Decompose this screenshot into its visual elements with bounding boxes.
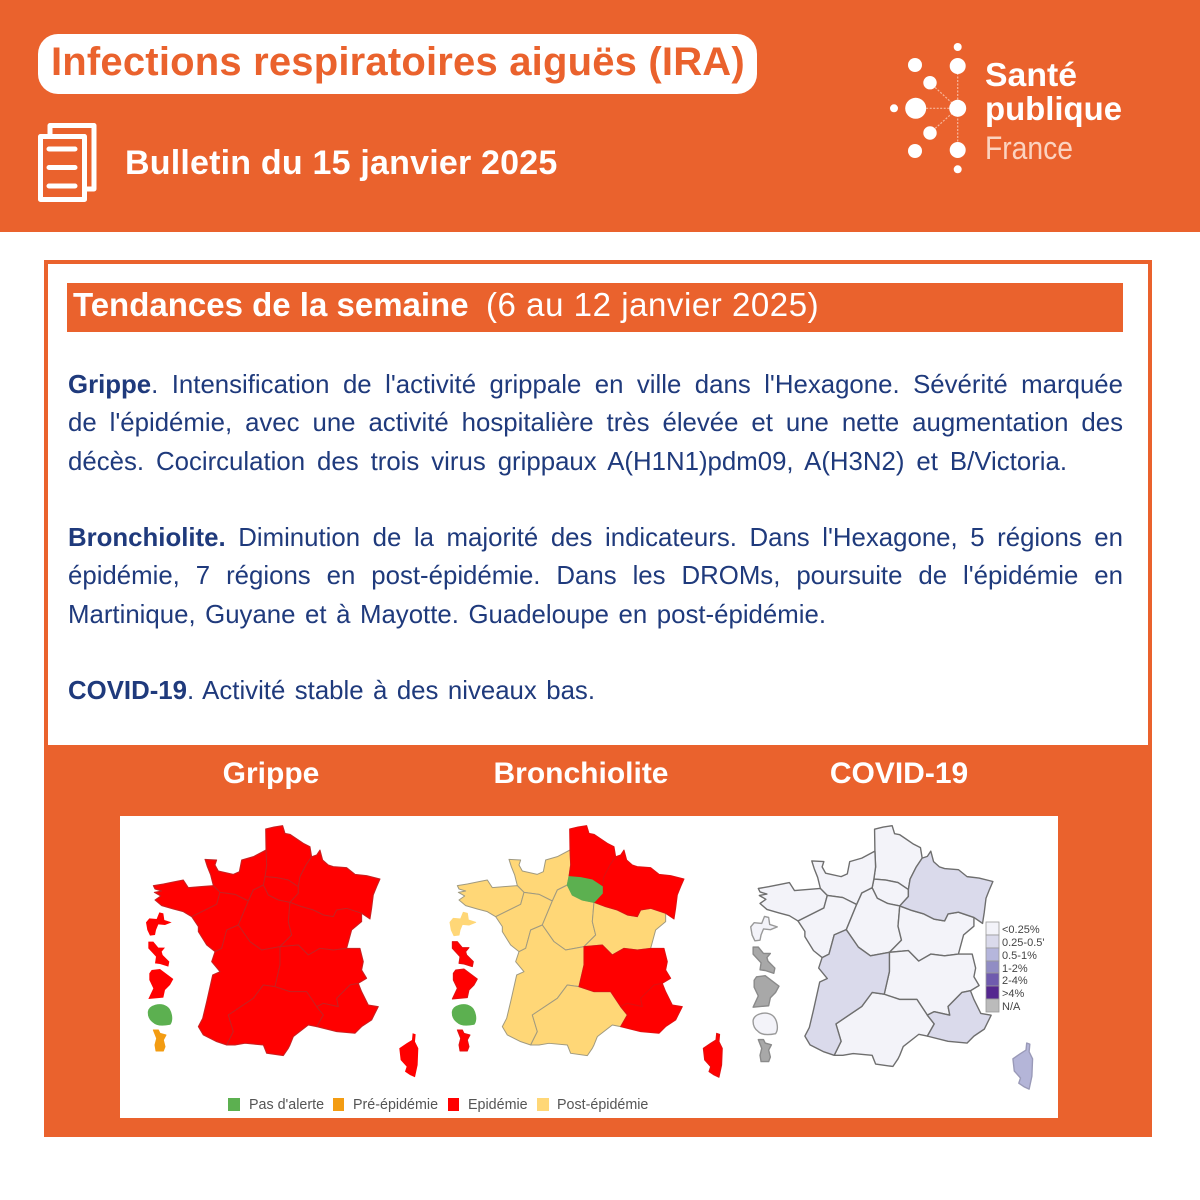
icon: document stack — [38, 123, 96, 202]
title pill: Infections respiratoires aiguës (IRA) — [51, 40, 745, 84]
legend: bronchiolite and grippe status — [228, 1097, 648, 1113]
panel: tendances de la semaine — [44, 260, 1152, 1137]
legend: bronchiolite and grippe status: Post-épidémie — [557, 1097, 648, 1113]
text block: grippe — [68, 371, 1123, 476]
header band — [0, 0, 1200, 232]
legend: covid-19 rates — [986, 922, 1044, 1013]
text block: bronchiolite — [68, 524, 1123, 629]
heading: covid-19: COVID-19 — [830, 757, 968, 790]
heading: dates: (6 au 12 janvier 2025) — [486, 286, 819, 323]
logo: Santé publique France — [890, 43, 1122, 174]
text block: grippe: Grippe. Intensification de l'activité grippale en ville dans l'Hexagone. Sévérité marquée — [68, 371, 1123, 399]
map: covid-19 — [751, 826, 1033, 1089]
map: grippe — [146, 826, 418, 1077]
legend: covid-19 rates: 0.25-0.5' — [1002, 937, 1044, 949]
bulletin date: Bulletin du 15 janvier 2025 — [125, 144, 557, 182]
logo: Santé publique France: publique — [985, 90, 1122, 127]
logo: Santé publique France: Santé — [985, 56, 1077, 93]
text block: bronchiolite: Bronchiolite. Diminution de la majorité des indicateurs. Dans l'Hexagone, 5 régions en — [68, 524, 1123, 552]
legend: covid-19 rates: N/A — [1002, 1001, 1021, 1013]
map: bronchiolite — [450, 826, 722, 1077]
heading: bronchiolite: Bronchiolite — [493, 757, 668, 790]
legend: covid-19 rates: 1-2% — [1002, 963, 1028, 975]
legend: bronchiolite and grippe status: Pas d'alerte — [249, 1097, 324, 1113]
legend: covid-19 rates: <0.25% — [1002, 924, 1040, 936]
maps background — [120, 816, 1058, 1118]
text block: grippe: décès. Cocirculation des trois virus grippaux A(H1N1)pdm09, A(H3N2) et B/Victoria. — [68, 448, 1067, 476]
legend: covid-19 rates: 2-4% — [1002, 975, 1028, 987]
heading: tendances: Tendances de la semaine — [73, 286, 469, 323]
text block: covid-19: COVID-19. Activité stable à des niveaux bas. — [68, 677, 595, 705]
legend: bronchiolite and grippe status: Pré-épidémie — [353, 1097, 438, 1113]
text block: bronchiolite: Martinique, Guyane et à Mayotte. Guadeloupe en post-épidémie. — [68, 601, 826, 629]
heading: grippe: Grippe — [223, 757, 319, 790]
text block: grippe: de l'épidémie, avec une activité hospitalière très élevée et une nette augmentation des — [68, 409, 1123, 437]
logo: Santé publique France: France — [985, 130, 1073, 166]
panel: cartes — [44, 745, 1152, 1137]
text block: bronchiolite: épidémie, 7 régions en post-épidémie. Dans les DROMs, poursuite de l'épidémie en — [68, 562, 1123, 590]
legend: covid-19 rates: >4% — [1002, 988, 1025, 1000]
legend: covid-19 rates: 0.5-1% — [1002, 950, 1037, 962]
legend: bronchiolite and grippe status: Epidémie — [468, 1097, 528, 1113]
section heading bar — [67, 283, 1123, 332]
